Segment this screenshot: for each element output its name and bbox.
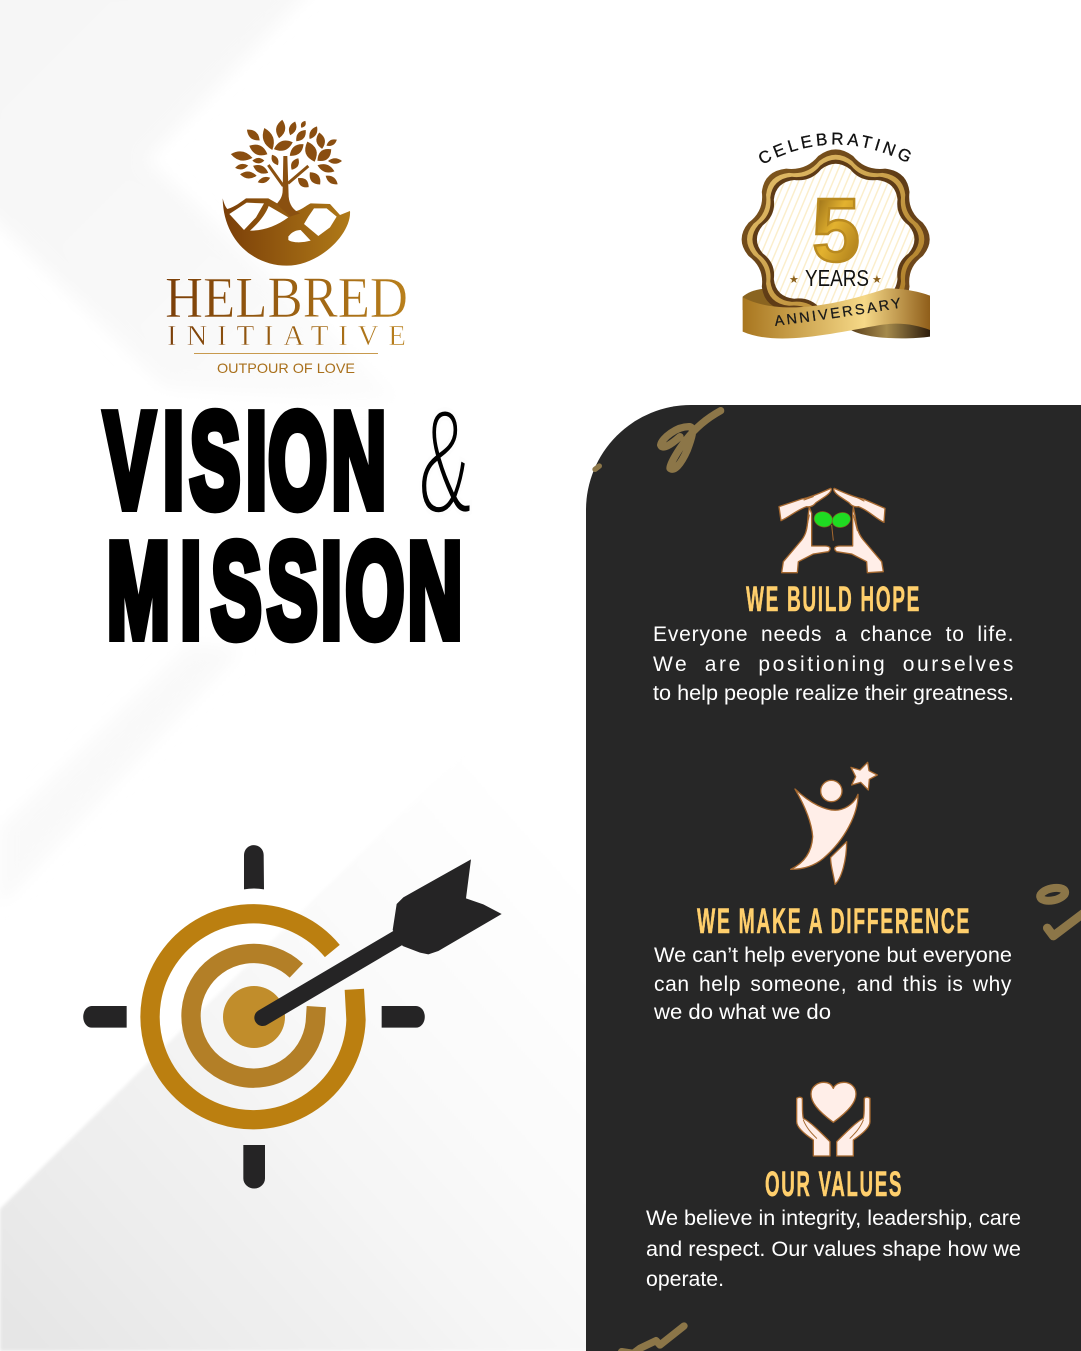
scribble: bottom	[622, 1326, 684, 1351]
logo wordmark: HELBRED	[165, 265, 408, 330]
icon: tree in hand	[223, 119, 350, 266]
badge frame	[742, 149, 930, 338]
logo subtitle: INITIATIVE	[167, 320, 406, 352]
title ampersand: &	[418, 377, 472, 545]
text block: and respect. Our values shape how we	[646, 1238, 1021, 1261]
badge ribbon text: ANNIVERSARY	[775, 298, 900, 326]
scribble: top	[595, 411, 721, 469]
text block: operate.	[646, 1268, 724, 1291]
badge arc text: celebrating: CELEBRATING	[759, 132, 911, 163]
text block: We are positioning ourselves	[653, 653, 1015, 676]
text block: Everyone needs a chance to life.	[653, 623, 1014, 646]
icon: figure reaching for star	[791, 762, 877, 884]
icon: target and arrow	[83, 845, 502, 1188]
scribble: right	[1039, 886, 1081, 936]
text block: We can’t help everyone but everyone	[654, 944, 1012, 967]
logo tagline: OUTPOUR OF LOVE	[217, 360, 355, 376]
section: we build hope	[653, 488, 1015, 705]
section: we make a difference	[653, 762, 1012, 1024]
text block	[653, 944, 1012, 1024]
badge ribbon back	[743, 288, 930, 338]
text block: We believe in integrity, leadership, care	[646, 1207, 1021, 1230]
badge years text: YEARS	[805, 265, 869, 291]
icon: hands holding heart	[797, 1082, 870, 1156]
badge stars: ★	[872, 274, 882, 286]
panel: dark values panel	[586, 405, 1081, 1351]
text block	[646, 1207, 1021, 1291]
icon: hands and seedling	[779, 488, 885, 573]
text block: we do what we do	[653, 1001, 831, 1024]
heading: WE BUILD HOPE	[746, 580, 921, 619]
badge numeral 5: 5	[812, 181, 860, 281]
heading: OUR VALUES	[765, 1165, 903, 1204]
anniversary badge	[742, 132, 930, 338]
text block	[653, 623, 1015, 705]
title line: mission: MISSION	[107, 516, 462, 667]
text block: can help someone, and this is why	[654, 973, 1012, 996]
logo: Helbred Initiative	[165, 119, 408, 376]
title	[104, 377, 472, 667]
text block: to help people realize their greatness.	[653, 682, 1014, 705]
title line: vision: VISION	[104, 386, 386, 537]
section: our values	[646, 1082, 1021, 1291]
badge stars: ★	[789, 274, 799, 286]
